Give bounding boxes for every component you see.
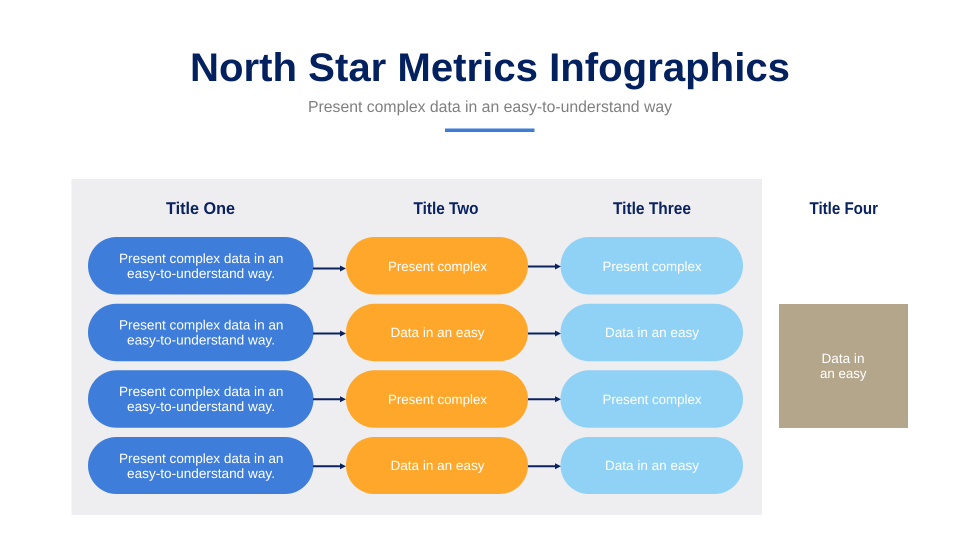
blue pill 4: easy-to-understand way. [127,466,275,481]
orange pill 4 [346,437,528,494]
orange pill 4: Data in an easy [390,458,485,473]
blue pill 2: easy-to-understand way. [127,332,275,348]
arrow 3b [528,396,561,402]
blue pill 3: Present complex data in an [119,384,284,399]
row 4 [88,437,743,494]
orange pill 2 [346,304,528,361]
panel: Title Four box: an easy [820,366,867,381]
arrow 2b [528,330,561,336]
accent rule [445,128,534,132]
blue pill 4: Present complex data in an [119,451,284,466]
arrow 4a [313,463,346,469]
orange pill 1: Present complex [388,259,487,274]
heading: Title Two: Title Two [414,199,478,218]
arrow 1a [313,266,346,272]
light blue pill 3: Present complex [602,392,702,407]
blue pill 3: easy-to-understand way. [127,399,275,414]
panel: Title Four box [779,304,908,428]
title: North Star Metrics Infographics [190,46,790,90]
blue pill 1: Present complex data in an [119,251,284,266]
heading: Title Three: Title Three [613,199,691,218]
row 3 [88,370,743,428]
blue pill 2 [88,304,314,361]
orange pill 2: Data in an easy [390,325,485,340]
row 2 [88,304,743,361]
heading: Title One: Title One [166,199,235,218]
arrow 1b [528,264,561,270]
light blue pill 2 [560,304,743,361]
blue pill 2: Present complex data in an [119,318,284,332]
light blue pill 1 [560,237,743,294]
light blue pill 4: Data in an easy [605,458,699,473]
light blue pill 3 [560,370,743,428]
heading: Title Four: Title Four [810,199,878,218]
subtitle: Present complex data in an easy-to-understand way [308,99,672,116]
arrow 3a [313,396,346,402]
light blue pill 4 [560,437,743,494]
arrow 2a [313,330,346,336]
row 1 [88,237,743,294]
panel: Title Four box: Data in [822,351,864,366]
blue pill 4 [88,437,314,494]
blue pill 1: easy-to-understand way. [127,266,275,281]
panel: flow background [72,179,762,515]
orange pill 3 [346,370,528,428]
blue pill 1 [88,237,314,294]
light blue pill 1: Present complex [602,259,702,274]
orange pill 1 [346,237,528,294]
arrow 4b [528,463,561,469]
light blue pill 2: Data in an easy [605,325,699,340]
blue pill 3 [88,370,314,428]
orange pill 3: Present complex [388,392,487,407]
